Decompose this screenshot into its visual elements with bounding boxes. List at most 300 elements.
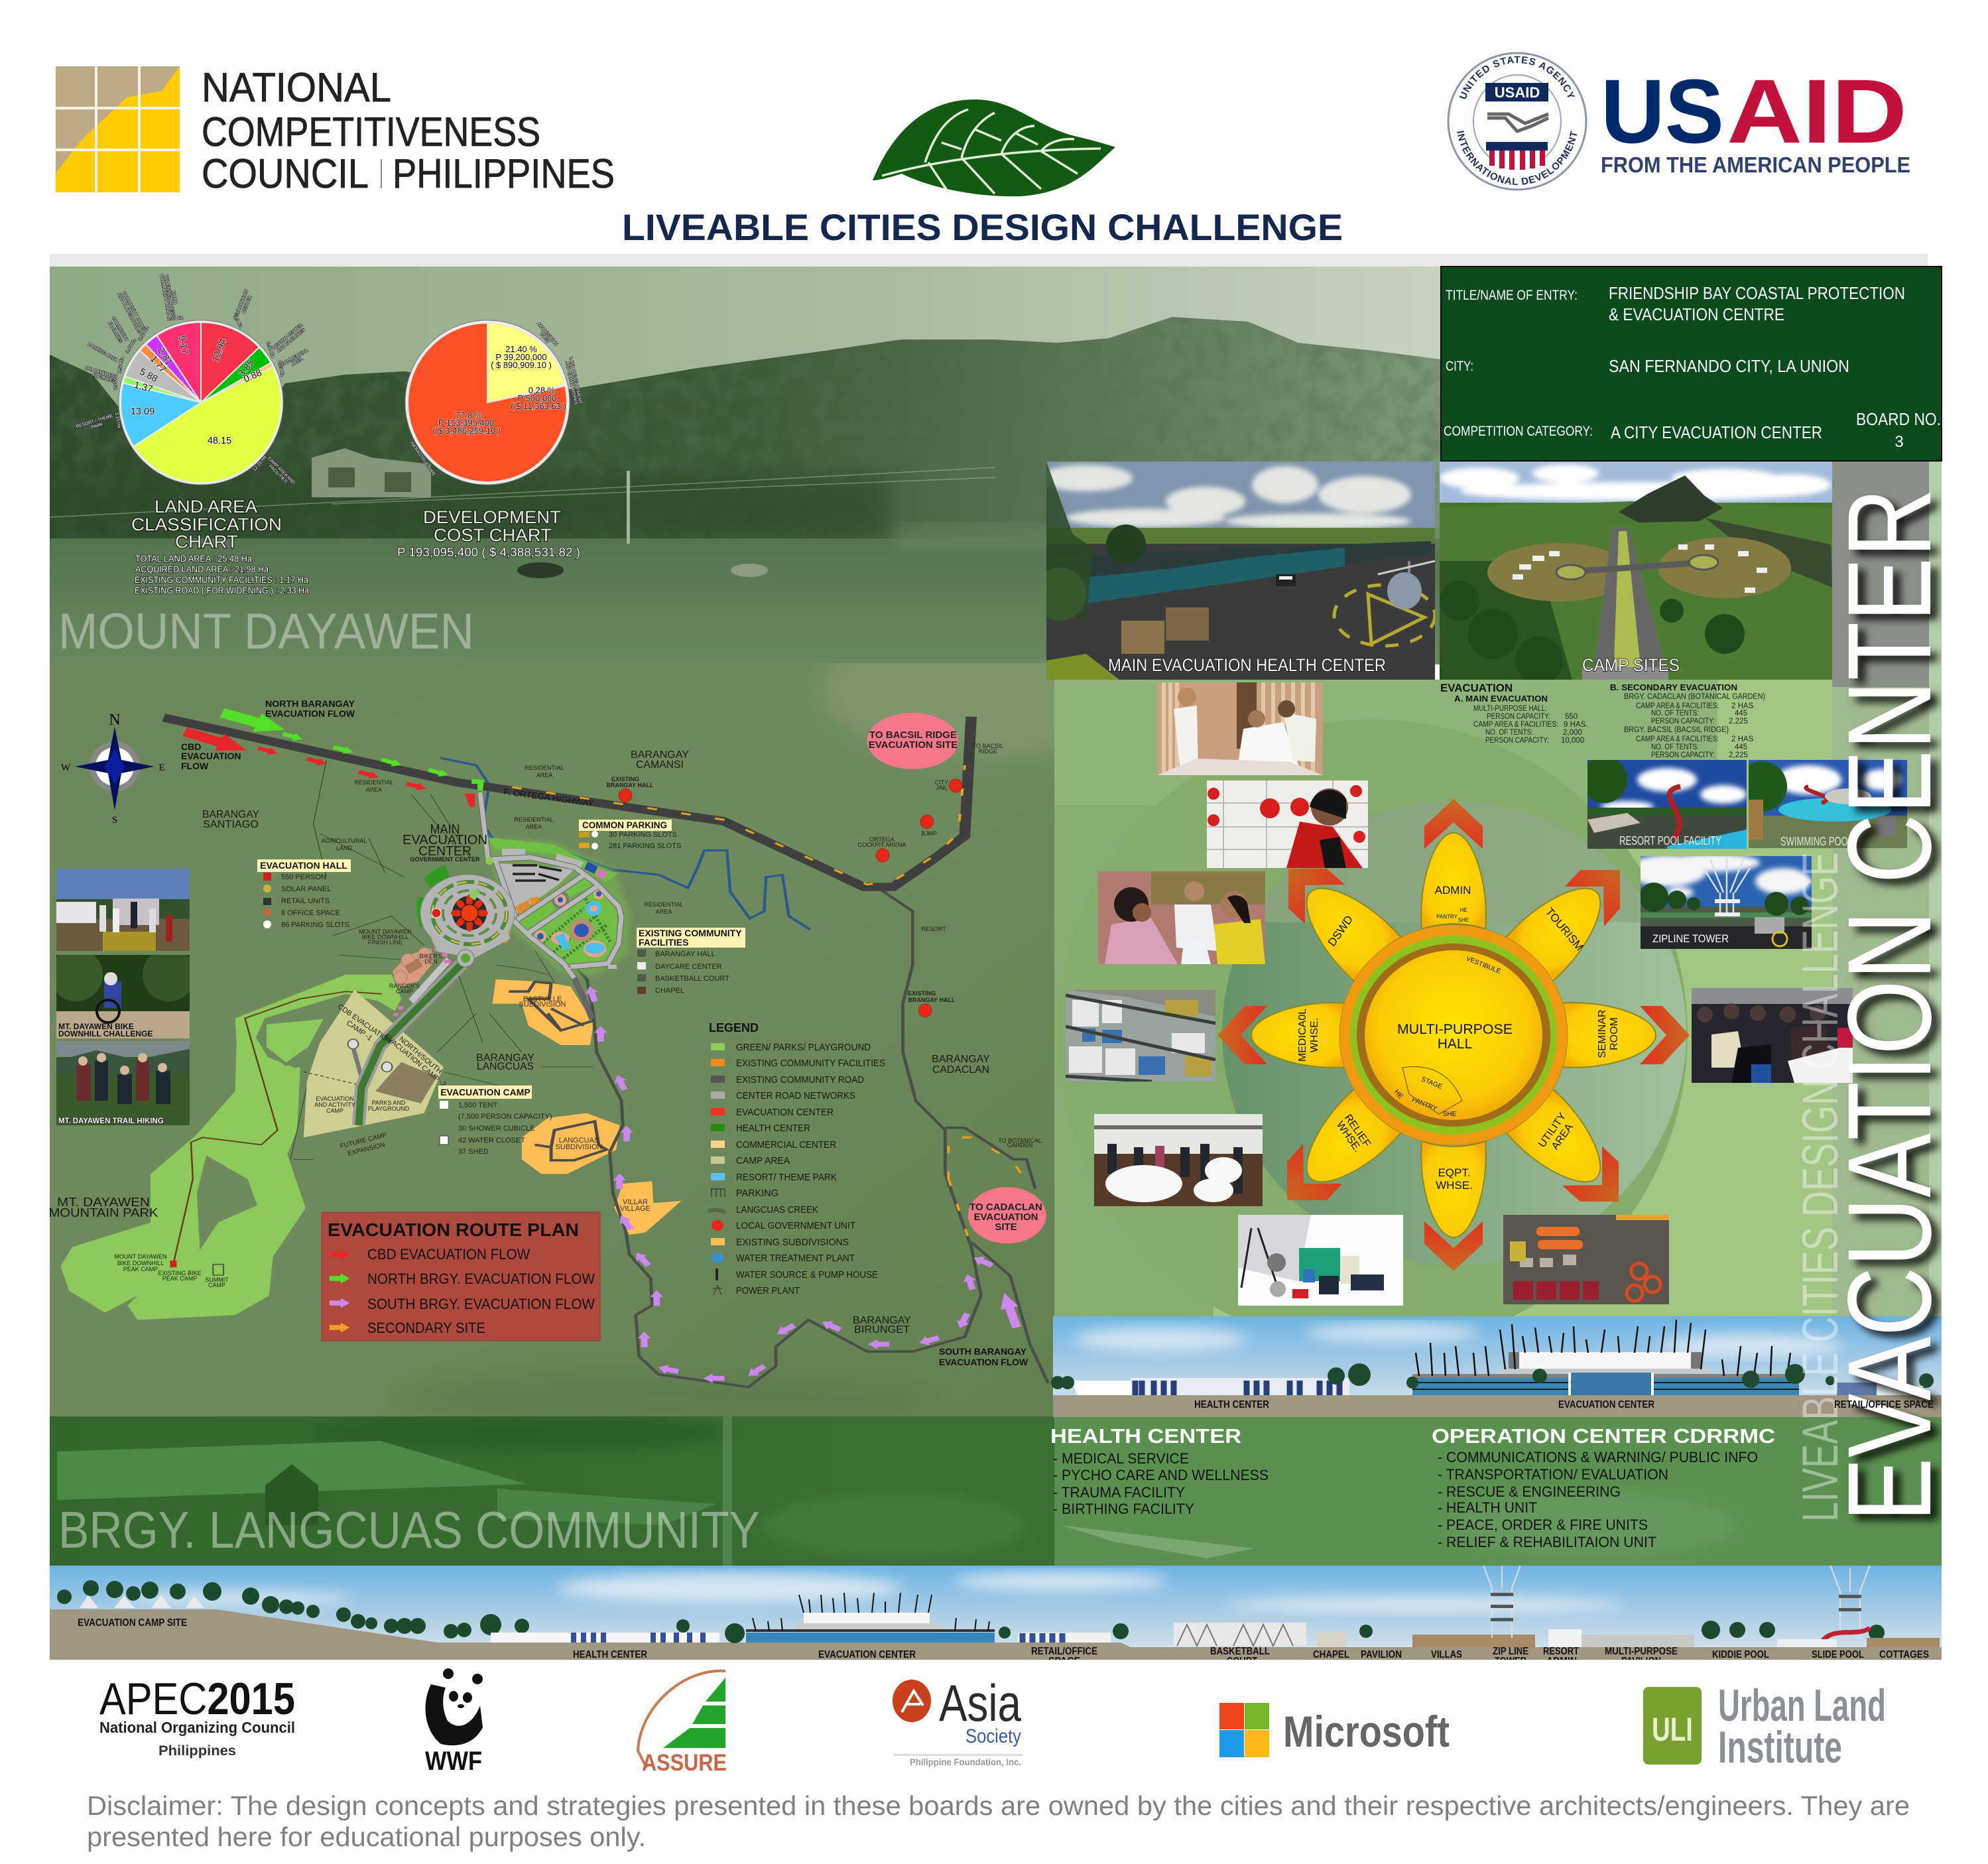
map small labels: RESIDENTIAL	[525, 765, 564, 771]
callout: common parking	[579, 820, 681, 850]
map place labels: BARANGAY	[932, 1054, 990, 1065]
label: camp sites: CAMP SITES	[1582, 655, 1680, 675]
logo: Asia Society: Philippine Foundation, Inc.	[910, 1757, 1021, 1767]
logo: National Competitiveness Council Philippines: NATIONAL	[202, 65, 391, 111]
evacuation site labels: TO CADACLAN	[969, 1202, 1042, 1213]
chart caption: land area: CHART	[175, 532, 238, 552]
central plaza	[420, 875, 515, 952]
text block: main evacuation capacity: MULTI-PURPOSE HALL:	[1473, 705, 1547, 713]
legend: EXISTING COMMUNITY ROAD	[736, 1074, 864, 1086]
map small labels	[114, 743, 1042, 1288]
legend: COMMERCIAL CENTER	[736, 1139, 836, 1150]
pie chart: land area classification: 0.35 Ha	[113, 374, 118, 390]
pie chart: land area classification: 13.09	[131, 406, 155, 417]
map small labels: RESIDENTIAL	[514, 816, 554, 823]
legend: CAMP AREA	[736, 1155, 790, 1166]
label: F. Ortega Highway: F. ORTEGA HIGHWAY	[503, 786, 595, 808]
subdivision labels: VILLAGE	[620, 1205, 651, 1213]
text block: health center services: - MEDICAL SERVICE	[1053, 1450, 1189, 1467]
room labels: PANTRY	[1410, 1096, 1438, 1113]
room labels: RELIEF	[1342, 1113, 1373, 1149]
map place labels: SANTIAGO	[203, 819, 259, 830]
label: retail office space: RETAIL/OFFICE SPACE	[1834, 1399, 1934, 1410]
legend: evacuation route plan: SECONDARY SITE	[367, 1320, 485, 1336]
logo: APEC 2015: National Organizing Council	[99, 1719, 295, 1736]
legend: CENTER ROAD NETWORKS	[736, 1090, 855, 1101]
pie chart: development cost	[405, 320, 582, 485]
callout: evacuation hall: 86 PARKING SLOTS	[281, 921, 349, 929]
text block: operation center services: - RELIEF & REHABILITAION UNIT	[1438, 1534, 1656, 1550]
room labels: ADMIN	[1435, 884, 1471, 897]
text block: secondary evacuation capacity: PERSON CAPACITY:	[1651, 751, 1715, 759]
room labels: SEMINAR	[1597, 1010, 1608, 1058]
garden strips	[519, 900, 556, 933]
text block: secondary evacuation capacity: CAMP AREA & FACILITIES:	[1636, 735, 1719, 743]
photo: zipline tower: ZIPLINE TOWER	[1652, 932, 1729, 945]
section labels: PAVILION	[1361, 1649, 1402, 1660]
pie chart: land area classification: RESORT / THEME	[76, 414, 113, 429]
pie chart: land area classification: FACILITIES	[268, 464, 288, 484]
text block: secondary evacuation capacity: BRGY. BACSIL (BACSIL RIDGE)	[1624, 726, 1729, 734]
room labels: MEDICA0L	[1297, 1009, 1308, 1062]
room labels: WHSE.	[1436, 1179, 1473, 1192]
text block: main evacuation capacity	[1440, 682, 1587, 745]
photo: trail hiking: MT. DAYAWEN TRAIL HIKING	[58, 1117, 164, 1125]
info box: entry details: CITY:	[1446, 359, 1473, 374]
disclaimer: presented here for educational purposes only.	[87, 1822, 646, 1852]
map small labels: RESIDENTIAL	[354, 779, 394, 786]
logo: National Competitiveness Council Philippines: COMPETITIVENESS	[202, 109, 540, 155]
label: swimming pool: SWIMMING POOL	[1780, 835, 1853, 848]
room labels: STAGE	[1420, 1076, 1444, 1091]
evacuation center building	[1412, 1320, 1799, 1395]
callout: evacuation camp: 37 SHED	[458, 1148, 489, 1156]
pie chart: development cost: AND EARTH WORKS	[564, 361, 578, 406]
text block: main evacuation capacity: NO. OF TENTS:	[1485, 729, 1533, 737]
evacuation center master plan complex	[359, 792, 630, 1125]
map small labels: BIKER'S	[420, 953, 442, 960]
pie chart: development cost: ACQUISITION	[536, 322, 558, 347]
map small labels: EXISTING BIKE	[158, 1270, 202, 1276]
flow labels: CBD	[181, 741, 201, 752]
south flow arrows	[583, 985, 1025, 1383]
pie chart: land area classification: FACILITIES	[92, 373, 116, 384]
chart caption: land area: ACQUIRED LAND AREA : 21.98 Ha	[135, 564, 269, 574]
section labels: ZIP LINE	[1493, 1646, 1528, 1657]
section labels: SLIDE POOL	[1812, 1649, 1864, 1660]
text block: secondary evacuation capacity: 2,225	[1729, 717, 1748, 725]
logo: Urban Land Institute: Institute	[1718, 1722, 1842, 1772]
map place labels: CENTER	[418, 844, 471, 859]
room labels: HE	[1460, 907, 1467, 913]
legend: evacuation route plan: NORTH BRGY. EVACUATION FLOW	[367, 1271, 595, 1287]
CBD flow arrows	[180, 723, 475, 806]
room labels: WHSE.	[1309, 1018, 1320, 1052]
chart caption: land area	[131, 497, 309, 595]
pie chart: land area classification: 0.23 Ha	[277, 360, 284, 377]
flow labels: SOUTH BARANGAY	[939, 1346, 1027, 1357]
creek	[440, 758, 810, 930]
map small labels: LAND	[336, 845, 353, 851]
text block: main evacuation capacity: PERSON CAPACITY:	[1487, 713, 1550, 721]
section labels: MULTI-PURPOSE	[1605, 1646, 1678, 1657]
map small labels: JAIL	[936, 784, 948, 791]
photo: trail hiking	[56, 1041, 190, 1125]
subdivision labels	[519, 995, 651, 1213]
room labels: VESTIBULE	[1465, 955, 1502, 975]
map small labels: RESIDENTIAL	[644, 901, 684, 908]
stage outline	[1402, 1067, 1462, 1114]
map small labels: RIDGE	[979, 748, 997, 755]
divider band	[50, 254, 1928, 267]
pie chart: land area classification: 0.88	[242, 367, 263, 385]
panel: Mount Dayawen photo backdrop	[50, 267, 1440, 664]
info box: entry details: COMPETITION CATEGORY:	[1444, 424, 1593, 439]
logo: ASSURE: ASSURE	[642, 1750, 727, 1776]
vertical ghost title: LIVEABLE CITIES DESIGN CHALLENGE	[1792, 852, 1849, 1522]
map small labels: PARKS AND	[372, 1099, 406, 1106]
callout: evacuation camp: 1,500 TENT	[458, 1101, 497, 1109]
pie chart: land area classification: 0.72 Ha	[138, 326, 150, 342]
panel: site map backdrop	[50, 663, 1054, 1416]
map small labels: PEAK CAMP	[123, 1266, 158, 1273]
residential lot lines	[290, 761, 593, 1159]
top green strip	[486, 838, 619, 882]
photo: zipline tower	[1641, 856, 1812, 949]
map small labels: BIKE DOWNHILL	[117, 1260, 164, 1267]
subdivision labels: SUBDIVISION	[519, 1001, 566, 1009]
map small labels: PEAK CAMP	[162, 1275, 197, 1282]
legend: HEALTH CENTER	[736, 1123, 810, 1134]
section labels: ADMIN	[1546, 1656, 1577, 1667]
legend: evacuation route plan: SOUTH BRGY. EVACUATION FLOW	[367, 1296, 595, 1312]
slope trees	[57, 1580, 1885, 1643]
logo: Urban Land Institute	[1643, 1680, 1886, 1772]
info box: entry details: & EVACUATION CENTRE	[1609, 304, 1784, 324]
legend: evacuation route plan	[322, 1212, 600, 1341]
section labels: TOWER	[1495, 1656, 1526, 1667]
logo: USAID: FROM THE AMERICAN PEOPLE	[1601, 153, 1910, 177]
pie chart: land area classification: COMMUNITY ROAD	[159, 274, 170, 316]
text block: health center services: - TRAUMA FACILITY	[1053, 1484, 1185, 1501]
biker's den	[393, 948, 434, 988]
pie chart: development cost: P 39,200,000	[495, 352, 547, 362]
room labels: SHE	[1458, 917, 1469, 923]
flow labels: NORTH BARANGAY	[265, 698, 355, 709]
logo: USAID	[1447, 52, 1910, 191]
logo: Asia Society: Society	[965, 1725, 1021, 1747]
pie chart: land area classification: 3.3 Ha	[232, 315, 243, 329]
pie chart: land area classification: AND FACILITIES	[277, 328, 306, 353]
room labels: HE	[1393, 1089, 1404, 1100]
camp tents	[80, 1595, 204, 1608]
text block: main evacuation capacity: EVACUATION	[1440, 682, 1513, 694]
pie chart: land area classification: MT. DAYAWEN	[84, 366, 115, 379]
text block: health center services: - PYCHO CARE AND WELLNESS	[1053, 1467, 1269, 1483]
camp area	[304, 990, 444, 1137]
callout: existing community facilities: BASKETBALL COURT	[655, 975, 729, 983]
room labels: EQPT.	[1438, 1166, 1471, 1179]
callout: evacuation camp: 30 SHOWER CUBICLE	[458, 1125, 535, 1133]
section labels: RESORT	[1543, 1646, 1579, 1657]
photo: bike podium	[56, 869, 190, 951]
pie chart: land area classification: 1.50 Ha	[117, 357, 125, 373]
photo: camp sites	[1440, 462, 1832, 680]
map small labels: EVACUATION CAMP -2	[383, 1032, 448, 1089]
map small labels: FINISH LINE	[368, 939, 403, 946]
diagram: multi-purpose hall sun layout	[1217, 799, 1690, 1271]
legend	[708, 1021, 885, 1296]
compass: E	[158, 763, 165, 773]
evacuation site labels: EVACUATION SITE	[869, 739, 958, 751]
legend: WATER TREATMENT PLANT	[736, 1253, 855, 1264]
subdivision labels: LANGCUAS	[559, 1137, 599, 1145]
disclaimer: Disclaimer: The design concepts and strategies presented in these boards are owned by the cities and their respective architects/engineers. They are	[87, 1790, 1910, 1821]
map small labels: AREA	[366, 786, 382, 793]
photo: seminar room	[1692, 988, 1853, 1083]
flow labels: FLOW	[181, 761, 209, 771]
subdivision labels: SUBDIVISION	[556, 1143, 603, 1151]
room labels: TOURISM	[1543, 905, 1586, 953]
room labels: AREA	[1550, 1121, 1576, 1152]
photo: medical warehouse shelves	[1066, 990, 1215, 1082]
section labels: EVACUATION CAMP SITE	[78, 1617, 187, 1629]
pie chart: land area classification: 3.33 Ha	[114, 412, 121, 428]
callout: evacuation hall: SOLAR PANEL	[281, 885, 332, 893]
pie chart: land area classification: 1.37	[133, 380, 154, 395]
photo: DSWD relief distribution	[1098, 871, 1265, 964]
hub rings	[1339, 925, 1568, 1145]
pie chart: development cost: 0.28 %	[528, 385, 556, 395]
section labels: COTTAGES	[1879, 1649, 1929, 1660]
callout: evacuation camp: (7,500 PERSON CAPACITY)	[458, 1113, 552, 1121]
text block: secondary evacuation capacity	[1610, 683, 1765, 759]
callout: evacuation hall: 8 OFFICE SPACE	[281, 909, 340, 917]
photo: shelter box equipment	[1238, 1215, 1403, 1306]
pie chart: development cost: ( $ 890,909.10 )	[491, 360, 552, 370]
photo: main evacuation health center	[1046, 462, 1435, 680]
government unit markers	[619, 779, 962, 1017]
map small labels: CAMP	[326, 1107, 343, 1114]
map small labels: BRANGAY HALL	[908, 997, 956, 1003]
map small labels: CAMP -1	[345, 1019, 373, 1042]
pie chart: land area classification: PARK	[91, 422, 104, 430]
map small labels: ORTEGA	[869, 836, 895, 843]
text block: main evacuation capacity: A. MAIN EVACUATION	[1454, 694, 1548, 704]
resort park	[532, 887, 617, 967]
text block: operation center services: - PEACE, ORDER & FIRE UNITS	[1438, 1517, 1648, 1533]
map place labels: GOVERNMENT CENTER	[410, 856, 480, 863]
text block: main evacuation capacity: PERSON CAPACITY:	[1485, 737, 1549, 745]
text block: main evacuation capacity: 550	[1565, 713, 1578, 721]
logo: APEC 2015: Philippines	[158, 1743, 236, 1759]
callout: evacuation camp: 42 WATER CLOSET	[458, 1137, 525, 1145]
flow labels: EVACUATION	[181, 751, 241, 761]
chart caption: land area: TOTAL LAND AREA : 25.48 Ha	[135, 554, 252, 564]
pie chart: land area classification: 2.33 Ha	[167, 316, 183, 322]
pie chart: development cost: ( $ 3,486,259.10 )	[433, 426, 501, 436]
map small labels: BJMP	[921, 830, 937, 837]
site map drawing	[60, 704, 1048, 1387]
legend: evacuation route plan: CBD EVACUATION FLOW	[367, 1246, 530, 1263]
section labels: COURT	[1227, 1656, 1257, 1667]
disclaimer	[87, 1790, 1910, 1852]
pie chart: land area classification: 0.98 Ha	[265, 342, 275, 358]
legend: PARKING	[736, 1188, 778, 1199]
room labels: PANTRY	[1436, 914, 1458, 920]
map small labels: EXISTING	[611, 776, 639, 782]
section labels: RETAIL/OFFICE	[1031, 1646, 1097, 1657]
map place labels	[49, 749, 990, 1336]
callout: common parking: COMMON PARKING	[582, 820, 667, 830]
lower evacuation center	[746, 1593, 995, 1643]
chart caption: development cost: DEVELOPMENT	[423, 507, 561, 527]
photo: rescue tools	[1503, 1215, 1669, 1304]
F. Ortega Highway	[164, 717, 971, 887]
info box: entry details: FRIENDSHIP BAY COASTAL PROTECTION	[1609, 283, 1905, 303]
compass: N	[109, 712, 121, 729]
room labels	[1297, 884, 1620, 1192]
flow labels: EVACUATION FLOW	[265, 708, 355, 719]
parking court	[499, 863, 575, 915]
retail, court and resort buildings	[1018, 1562, 1940, 1647]
logo: USAID: US	[1601, 61, 1724, 162]
section labels	[78, 1617, 1929, 1667]
map small labels: GARDEN	[1007, 1142, 1032, 1149]
text block: health center services	[1050, 1424, 1269, 1517]
evacuation site labels: SITE	[995, 1221, 1017, 1233]
text block: operation center services: - COMMUNICATIONS & WARNING/ PUBLIC INFO	[1438, 1449, 1758, 1465]
text block: secondary evacuation capacity: BRGY. CADACLAN (BOTANICAL GARDEN)	[1624, 693, 1765, 701]
logo: Urban Land Institute: Urban Land	[1718, 1680, 1886, 1731]
room labels: DSWD	[1326, 913, 1355, 949]
text block: main evacuation capacity: 2,000	[1563, 729, 1582, 737]
map place labels: CAMANSI	[636, 759, 684, 771]
boulevard to camp	[359, 963, 462, 1125]
callout: existing community facilities: BARANGAY HALL	[655, 950, 715, 958]
text block: main evacuation capacity: CAMP AREA & FACILITIES:	[1473, 721, 1558, 729]
photo: nurses	[1157, 682, 1323, 775]
map place labels: BARANGAY	[853, 1315, 911, 1326]
label: main evacuation health center: MAIN EVACUATION HEALTH CENTER	[1108, 655, 1386, 675]
logo: APEC 2015: APEC2015	[99, 1674, 295, 1724]
pie chart: land area classification: 0.45 Ha	[125, 338, 137, 354]
logo: National Competitiveness Council Philippines: COUNCIL	[202, 151, 369, 197]
chart caption: development cost	[397, 507, 580, 559]
logo: Microsoft	[1219, 1703, 1450, 1757]
map place labels: BARANGAY	[476, 1052, 534, 1064]
callout: existing community facilities: EXISTING COMMUNITY	[639, 928, 742, 938]
logo: National Competitiveness Council Philippines	[56, 65, 615, 197]
map small labels: CITY	[935, 779, 948, 786]
callout: evacuation hall: RETAIL UNITS	[281, 897, 330, 905]
text block: secondary evacuation capacity: 2 HAS	[1731, 735, 1754, 743]
section labels: CHAPEL	[1313, 1649, 1349, 1660]
map small labels: RESORT	[921, 926, 946, 932]
pie chart: land area classification: EVACUATION	[234, 289, 249, 318]
pie chart: land area classification: HEALTH CENTER	[272, 323, 304, 351]
room labels: MULTI-PURPOSE	[1397, 1022, 1513, 1037]
map place labels: MOUNTAIN PARK	[49, 1206, 158, 1219]
compass: S	[112, 815, 117, 826]
info box: entry details: 3	[1895, 433, 1904, 451]
text block: secondary evacuation capacity: B. SECONDARY EVACUATION	[1610, 683, 1737, 692]
text block: operation center services	[1432, 1424, 1775, 1550]
pie chart: land area classification: 12.94	[211, 338, 229, 363]
map small labels: DEN	[424, 958, 438, 965]
secondary site dashes	[512, 765, 1033, 1237]
evacuation site labels	[869, 729, 1042, 1233]
map small labels: MOUNT DAYAWEN	[114, 1253, 167, 1260]
evacuation site labels: TO BACSIL RIDGE	[869, 729, 957, 741]
pie chart: development cost: P 153,395,400	[438, 418, 494, 428]
green buildings	[424, 865, 450, 890]
evacuation site labels: EVACUATION	[974, 1212, 1038, 1223]
lower health center	[491, 1633, 719, 1643]
pie chart: development cost: 77.8 %	[456, 410, 483, 420]
section trees	[1051, 1363, 1934, 1389]
section labels: HEALTH CENTER	[573, 1649, 647, 1660]
photo: bike downhill challenge	[56, 955, 190, 1038]
text block: secondary evacuation capacity: NO. OF TENTS:	[1651, 710, 1699, 717]
section labels: VILLAS	[1431, 1649, 1462, 1660]
pie chart: land area classification: 12.25 Ha	[252, 455, 268, 472]
text block: health center services: HEALTH CENTER	[1050, 1424, 1241, 1448]
map small labels: TO BOTANICAL	[998, 1137, 1042, 1144]
pie chart: land area classification: 3.85	[237, 357, 257, 379]
panel: bottom-left community photo	[50, 1416, 1054, 1566]
map small labels: RANGER'S	[389, 983, 420, 989]
heading: Brgy. Langcuas Community: BRGY. LANGCUAS COMMUNITY	[58, 1501, 760, 1559]
heading: Mount Dayawen: MOUNT DAYAWEN	[58, 603, 474, 660]
logo: WWF	[425, 1668, 483, 1776]
pie chart: development cost: LAND DEVELOPMENT	[568, 357, 582, 404]
map small labels: AND ACTIVITY	[314, 1101, 355, 1108]
pie chart: development cost: P 500,000	[517, 393, 557, 403]
text block: secondary evacuation capacity: 445	[1735, 743, 1747, 751]
legend: WATER SOURCE & PUMP HOUSE	[736, 1269, 878, 1280]
info box: entry details: BOARD NO.	[1856, 409, 1941, 429]
pie chart: land area classification: ROAD	[170, 290, 178, 304]
callout: existing community facilities: FACILITIES	[639, 937, 688, 948]
chart caption: development cost: COST CHART	[434, 525, 552, 545]
pie chart: land area classification: CENTER	[241, 295, 253, 314]
pie chart: land area classification: 1.77	[148, 353, 168, 375]
text block: secondary evacuation capacity: 2 HAS	[1731, 702, 1754, 710]
logo: APEC 2015	[99, 1674, 295, 1759]
legend: GREEN/ PARKS/ PLAYGROUND	[736, 1042, 871, 1053]
map small labels: EVACUATION	[316, 1095, 354, 1102]
pie chart: land area classification: COMMUNITY	[111, 316, 129, 343]
map place labels: BARANGAY	[631, 749, 689, 761]
callout: existing community facilities	[637, 928, 745, 995]
room labels: SHE	[1443, 1111, 1457, 1118]
photo: relief bags	[1094, 1114, 1263, 1206]
section labels: SPACE	[1048, 1656, 1080, 1667]
room labels: HALL	[1438, 1036, 1472, 1052]
legend: EVACUATION CENTER	[736, 1107, 834, 1118]
flow labels: EVACUATION FLOW	[939, 1357, 1028, 1367]
callout: evacuation camp: EVACUATION CAMP	[440, 1087, 530, 1097]
pie chart: development cost: COST	[538, 332, 550, 345]
logo: ASSURE	[638, 1671, 727, 1776]
callout: evacuation hall: EVACUATION HALL	[260, 860, 347, 871]
panel: lower site section elevation	[50, 1562, 1942, 1667]
pie chart: land area classification: COMMUNITY PARKS	[121, 290, 146, 332]
section labels: PAVILION	[1621, 1656, 1661, 1667]
subdivisions	[493, 979, 682, 1235]
info box: entry details: SAN FERNANDO CITY, LA UNION	[1609, 356, 1849, 376]
